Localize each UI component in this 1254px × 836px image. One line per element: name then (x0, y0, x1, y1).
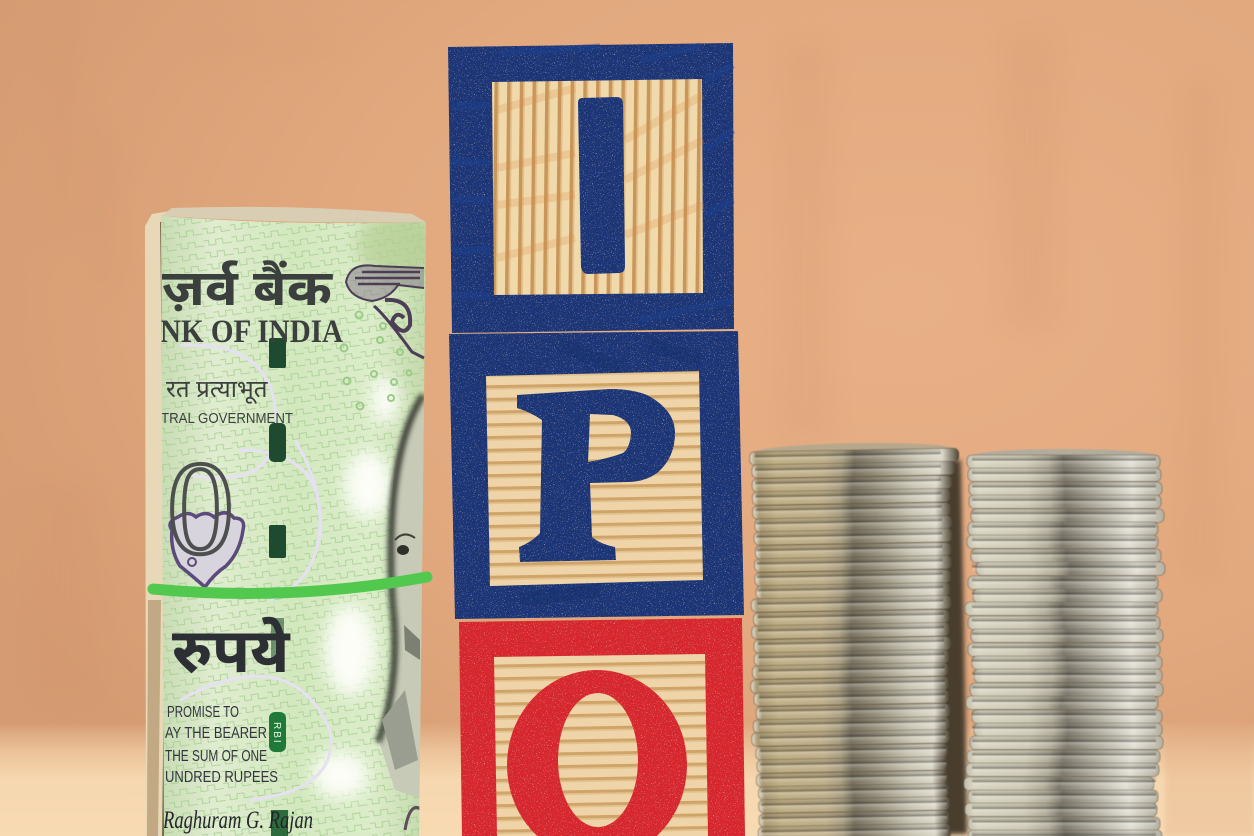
RBI thread label: RBI (271, 722, 282, 745)
table right tint (1165, 730, 1254, 836)
grain bands (497, 88, 703, 258)
left coin stack (747, 441, 968, 836)
wooden table (0, 722, 1254, 836)
security thread (269, 338, 288, 836)
note text: NK OF INDIA (160, 314, 343, 350)
right coin stack (964, 449, 1165, 836)
note details clipped to body (160, 210, 433, 836)
blue frame (449, 331, 744, 619)
rear shadow (937, 460, 967, 835)
coin rim shading (972, 455, 1156, 836)
blue frame (448, 43, 734, 333)
note text: ज़र्व बैंक (162, 260, 334, 316)
coin rim shading (755, 449, 948, 836)
red frame (459, 618, 745, 836)
portrait of Gandhi (378, 395, 426, 830)
note text: रत प्रत्याभूत (166, 376, 269, 404)
block: letter I (448, 43, 734, 333)
note text: AY THE BEARER (165, 725, 267, 742)
note top edge (161, 207, 426, 222)
guilloche pattern (161, 210, 426, 836)
block: letter O (459, 618, 745, 836)
note text: TRAL GOVERNMENT (161, 410, 293, 427)
letter I (578, 97, 625, 274)
stack top (972, 449, 1156, 463)
note paper flap (145, 210, 176, 836)
note text: THE SUM OF ONE (165, 748, 267, 765)
denomination numeral with ornate base (168, 462, 246, 588)
wood panel (492, 79, 703, 295)
letter O counter (558, 693, 638, 827)
green rubber band (153, 577, 427, 593)
note text (160, 260, 343, 834)
frame streaks (520, 345, 700, 600)
note text: रुपये (172, 615, 291, 686)
frame streaks (452, 46, 733, 320)
wood panel (486, 371, 703, 586)
green ring dots (340, 312, 412, 410)
rolled rupee banknote (145, 207, 433, 836)
note text: PROMISE TO (167, 704, 239, 721)
coins (964, 455, 1165, 836)
ornament swirl (346, 265, 424, 358)
block: letter P (449, 331, 744, 619)
wall streaks (30, 20, 1220, 700)
stack top (755, 441, 955, 461)
letter P (517, 389, 675, 562)
coins (747, 448, 965, 836)
note body (161, 216, 426, 836)
pale floral arcs (180, 345, 331, 800)
letter O (507, 670, 687, 836)
top right green tint (351, 222, 426, 276)
note text: Raghuram G. Rajan (162, 807, 313, 834)
note text: UNDRED RUPEES (165, 769, 278, 786)
wood panel (494, 654, 708, 836)
denomination numeral with ornate base: 0 (167, 434, 234, 582)
white highlights (312, 376, 399, 799)
